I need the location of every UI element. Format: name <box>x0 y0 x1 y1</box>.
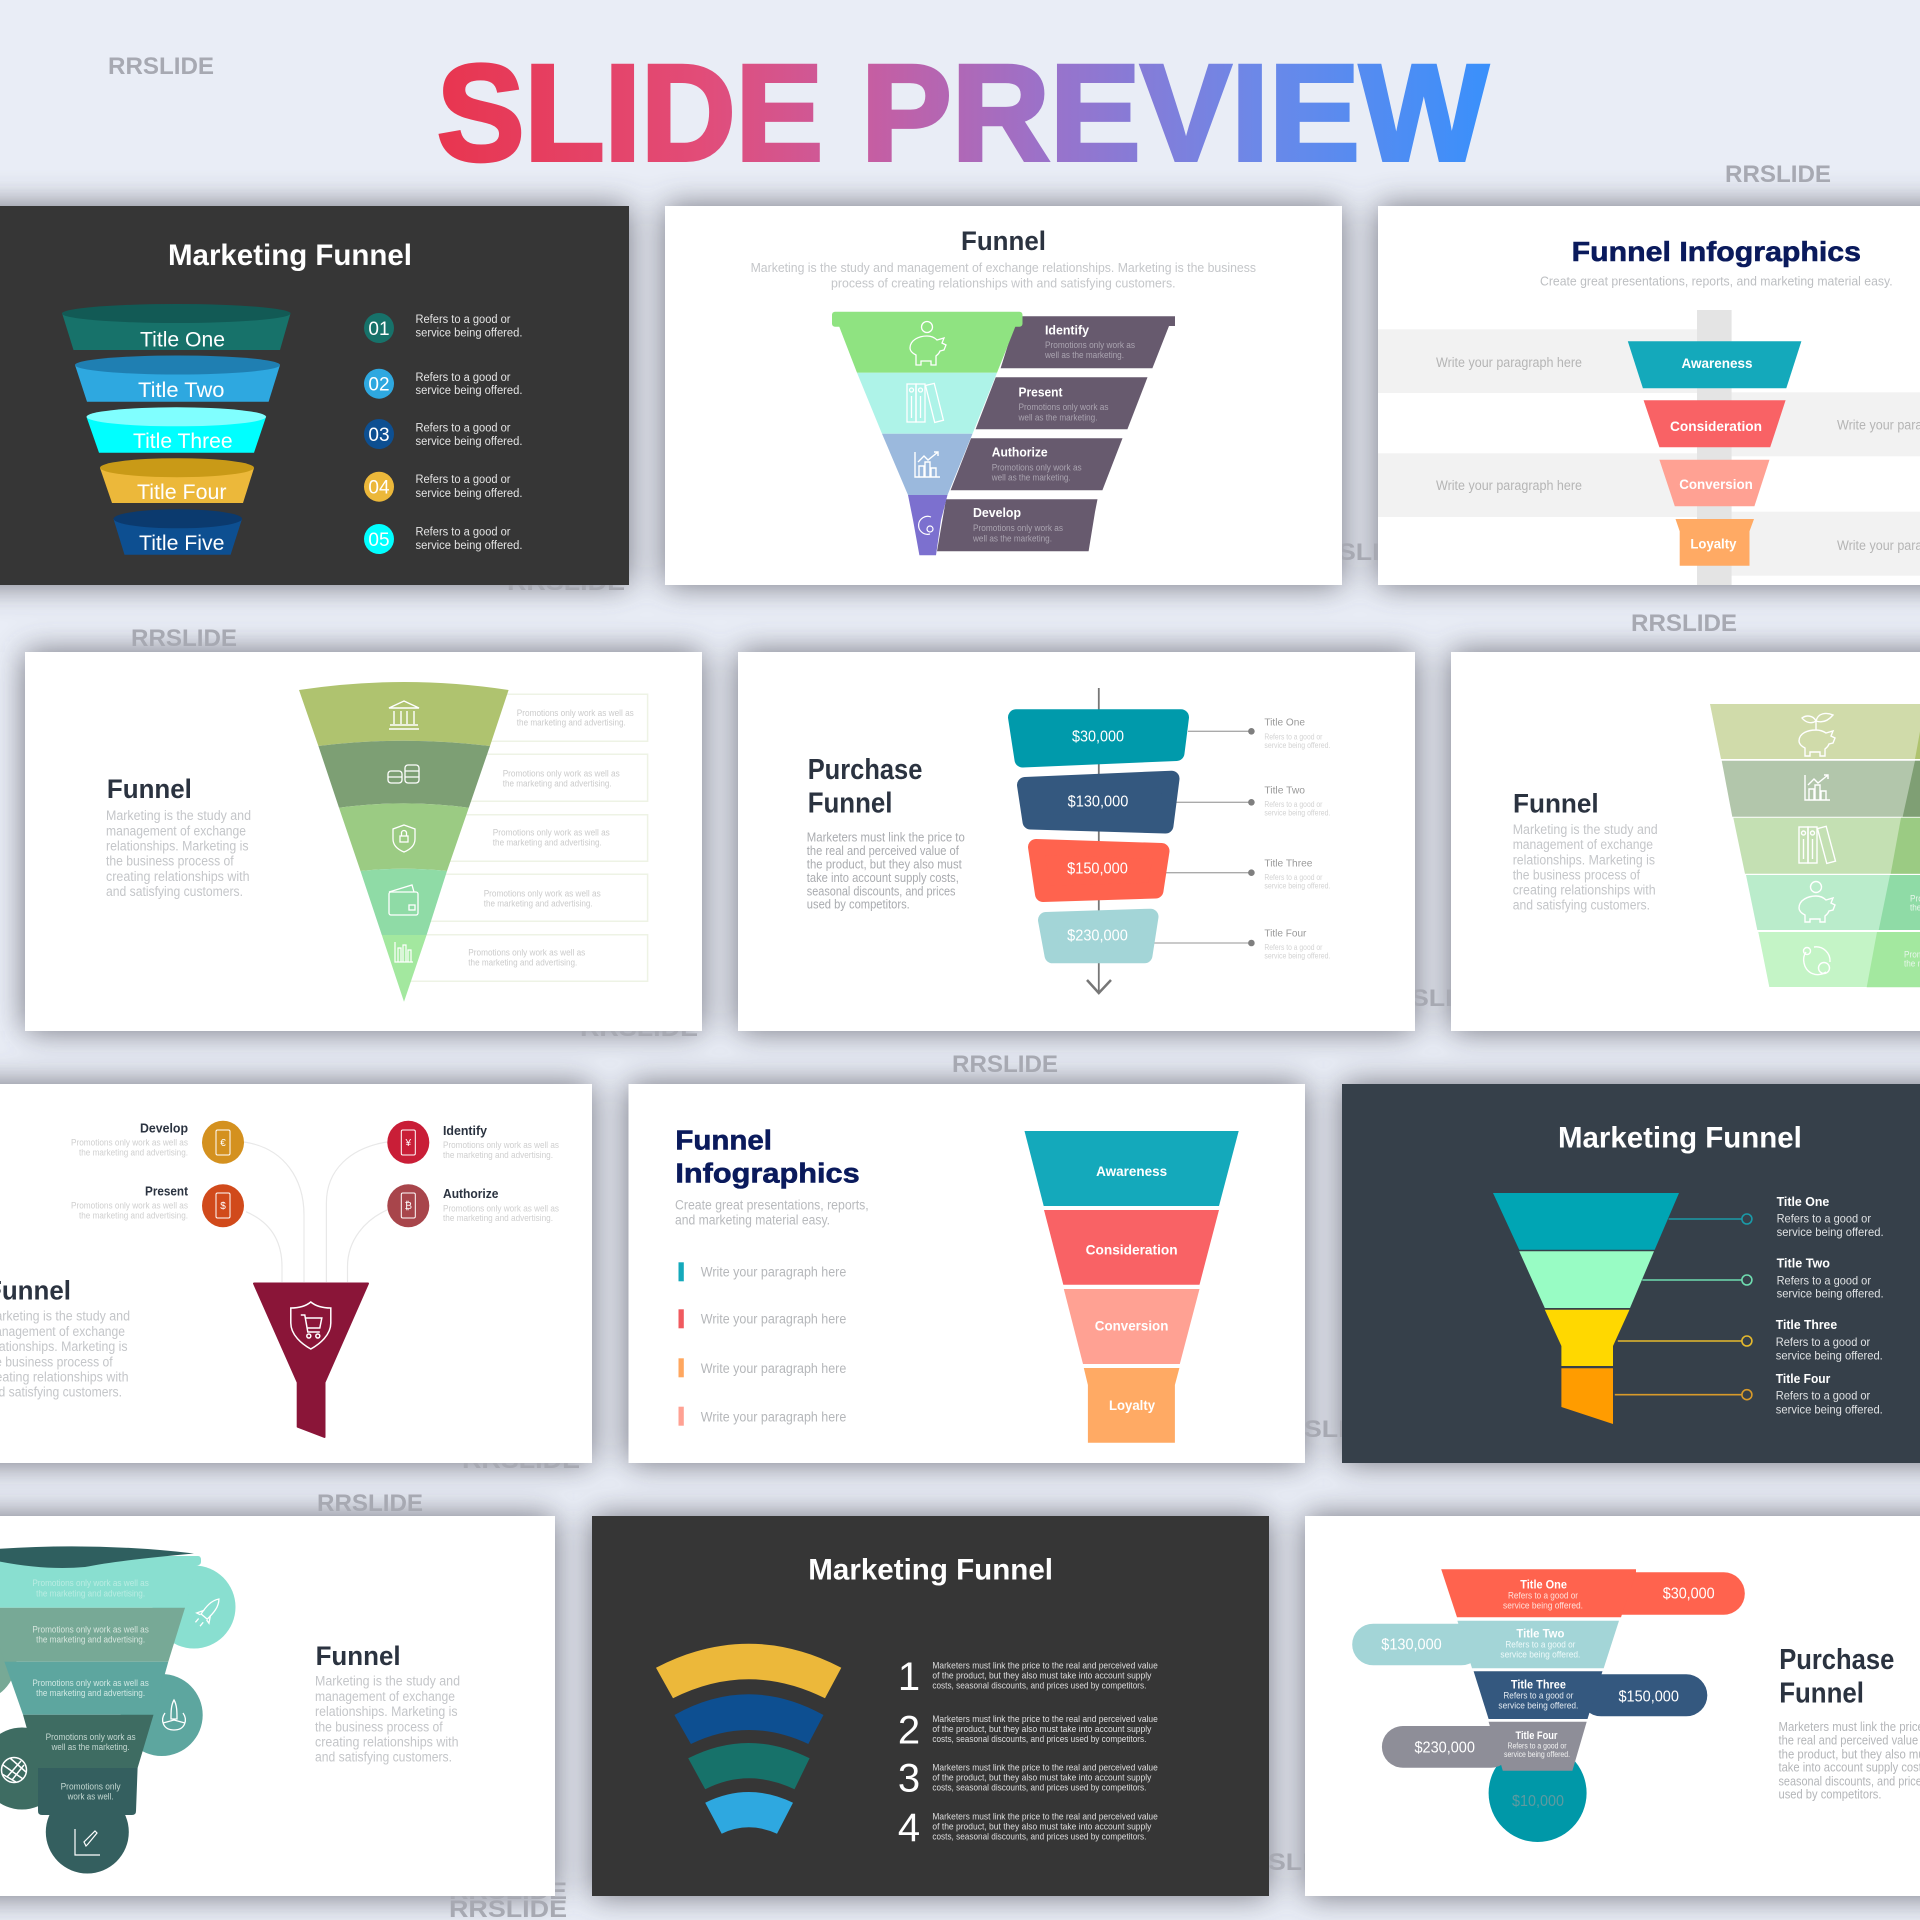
paragraph <box>106 808 251 899</box>
channel labels: Promotions only work as well as <box>443 1203 559 1213</box>
funnel chart: Title Three <box>133 430 233 453</box>
icon: bank <box>389 701 419 729</box>
heading: Funnel <box>675 1124 772 1155</box>
heading: Purchase <box>1779 1644 1894 1676</box>
subtitle: Marketing is the study and management of exchange relationships. Marketing is the business <box>751 261 1256 275</box>
channel labels <box>71 1121 559 1223</box>
labels: service being offered. <box>1777 1287 1884 1301</box>
bar labels: Authorize <box>992 445 1048 460</box>
funnel stages: Conversion <box>1679 476 1753 492</box>
channel labels: the marketing and advertising. <box>79 1148 188 1158</box>
numbered list: 05 <box>368 530 390 551</box>
stage: title four <box>1382 1722 1587 1771</box>
icon: coins <box>388 765 419 783</box>
paragraph: relationships. Marketing is <box>1513 852 1655 867</box>
numbers <box>898 1655 920 1850</box>
paragraphs <box>932 1660 1158 1842</box>
block values: $30,000 <box>1072 729 1124 746</box>
watermarks: RRSLIDE <box>317 1490 423 1517</box>
subtitle: process of creating relationships with and satisfying customers. <box>831 277 1176 291</box>
channel labels: Authorize <box>443 1186 498 1201</box>
icon: bars <box>395 942 413 962</box>
bar labels: Present <box>1018 385 1063 400</box>
connector lines <box>1154 728 1255 946</box>
paragraph: and satisfying customers. <box>106 884 243 899</box>
block values: $150,000 <box>1067 860 1128 877</box>
numbered list: 01 <box>368 319 390 340</box>
stage: title four: Title Four <box>1516 1730 1558 1742</box>
numbers: 1 <box>898 1655 920 1699</box>
bar labels: well as the marketing. <box>1044 350 1124 360</box>
stage: title four: Refers to a good or <box>1508 1742 1567 1751</box>
funnel chart: Title Four <box>137 481 226 504</box>
bar labels: Promotions only work as <box>1045 340 1135 350</box>
paragraph <box>807 830 965 912</box>
paragraph: Marketing is the study and <box>106 808 251 823</box>
funnel chart: Title Two <box>138 379 224 402</box>
box text: Promotions only work as well as <box>517 708 634 718</box>
stage: title one <box>1441 1569 1745 1617</box>
labels: service being offered. <box>1777 1225 1884 1239</box>
layer text: the marketing and advertising. <box>36 1688 145 1698</box>
layer text: Promotions only work as <box>46 1732 136 1742</box>
bar labels: Develop <box>973 505 1021 520</box>
labels: Title Two <box>1777 1255 1830 1270</box>
paragraph: the business process of <box>315 1719 443 1734</box>
watermarks: RRSLIDE <box>449 1878 567 1905</box>
channel labels: the marketing and advertising. <box>79 1211 188 1221</box>
description bars <box>937 316 1175 551</box>
bar labels: Identify <box>1045 322 1090 337</box>
heading: Infographics <box>675 1158 860 1189</box>
heading: Marketing Funnel <box>168 239 412 272</box>
bar labels: well as the marketing. <box>1018 413 1098 423</box>
stage: title four: $230,000 <box>1414 1739 1475 1756</box>
numbered list <box>364 313 522 554</box>
stage: title two: service being offered. <box>1500 1649 1580 1659</box>
paragraph <box>1778 1720 1920 1802</box>
cone chart <box>299 682 509 1002</box>
block values: $230,000 <box>1067 928 1128 945</box>
watermarks: RRSLIDE <box>462 1447 580 1474</box>
stage: title four: service being offered. <box>1504 1750 1570 1759</box>
funnel layers <box>0 1546 201 1815</box>
labels: service being offered. <box>1776 1348 1883 1362</box>
labels: Refers to a good or <box>1777 1212 1871 1226</box>
numbers: 4 <box>898 1806 920 1850</box>
channel labels: the marketing and advertising. <box>443 1150 553 1160</box>
arc funnel <box>656 1644 841 1834</box>
panel: marketing funnel dark five titles <box>0 206 629 585</box>
funnel light layers <box>1710 704 1920 987</box>
description boxes <box>405 694 648 981</box>
panel: funnel infographics with bands <box>1378 206 1920 585</box>
paragraph <box>1513 822 1658 913</box>
paragraph: used by competitors. <box>1778 1788 1882 1802</box>
box text <box>468 708 634 968</box>
panel: teal rocket funnel <box>0 1516 555 1896</box>
bar labels: Promotions only work as <box>992 463 1082 473</box>
arrow <box>1087 688 1111 993</box>
circle icons: ¥ <box>405 1138 412 1149</box>
labels <box>1776 1194 1884 1416</box>
paragraphs: of the product, but they also must take into account supply <box>932 1821 1152 1832</box>
watermarks: RRSLIDE <box>1265 1416 1383 1443</box>
numbered list: service being offered. <box>416 488 522 500</box>
watermarks: RRSLIDE <box>108 53 214 80</box>
subtitle <box>675 1197 869 1228</box>
watermarks: RRSLIDE <box>1372 985 1490 1012</box>
title: SLIDE <box>437 37 823 190</box>
funnel stages <box>1628 341 1801 566</box>
paragraphs: Marketers must link the price to the real and perceived value <box>932 1762 1158 1773</box>
paragraph: creating relationships with <box>106 869 250 884</box>
paragraph: the business process of <box>1513 867 1640 882</box>
circle icons: ₿ <box>405 1200 412 1212</box>
paragraphs: Marketers must link the price to the real and perceived value <box>932 1660 1158 1671</box>
side labels: Title Three <box>1264 858 1313 870</box>
stage: title one: Refers to a good or <box>1508 1591 1578 1601</box>
panel: red funnel with four channels <box>0 1084 592 1463</box>
side labels: Title One <box>1264 717 1305 729</box>
funnel stages: Awareness <box>1682 355 1753 371</box>
side labels: service being offered. <box>1264 951 1330 960</box>
side circles <box>0 1566 236 1874</box>
numbered list: service being offered. <box>416 328 522 340</box>
layer text: work as well. <box>67 1791 114 1801</box>
watermarks: RRSLIDE <box>131 625 237 652</box>
paragraphs: costs, seasonal discounts, and prices used by competitors. <box>932 1734 1146 1745</box>
funnel stages: Conversion <box>1095 1318 1168 1334</box>
labels: Title One <box>1777 1194 1829 1209</box>
numbered list: Refers to a good or <box>416 314 511 326</box>
icon: plant piggy <box>1799 713 1835 756</box>
layer text: Promotions only work as well as <box>32 1578 149 1588</box>
bar labels: Promotions only work as <box>1018 402 1109 412</box>
heading: Funnel <box>1513 789 1599 819</box>
side labels: service being offered. <box>1264 741 1330 750</box>
stage: title three: Title Three <box>1511 1677 1566 1691</box>
numbered list: Refers to a good or <box>416 474 511 486</box>
layer text <box>32 1578 149 1801</box>
labels: Refers to a good or <box>1776 1335 1870 1349</box>
panel: marketing funnel slate <box>1342 1084 1920 1463</box>
funnel cone <box>832 312 1022 555</box>
bullet list: Write your paragraph here <box>701 1410 846 1425</box>
heading: Funnel <box>808 788 892 820</box>
side labels: Title Four <box>1264 927 1307 939</box>
icon: shield lock <box>393 825 415 852</box>
icon: globe rocket <box>2 1758 26 1782</box>
icon: rocket <box>192 1594 225 1629</box>
channel labels: Promotions only work as well as <box>443 1140 559 1150</box>
paragraphs: costs, seasonal discounts, and prices used by competitors. <box>932 1782 1146 1793</box>
numbered list: service being offered. <box>416 436 522 448</box>
panel: purchase funnel <box>738 652 1415 1031</box>
paragraph: Marketers must link the price to <box>807 830 965 844</box>
icon: shield cart <box>291 1302 331 1349</box>
layer text: the marketing and advertising. <box>36 1588 145 1598</box>
funnel chart: Title One <box>140 329 225 352</box>
box text: the marketing and advertising. <box>517 718 626 728</box>
bullet list: Write your paragraph here <box>701 1312 846 1327</box>
icon: piggy coin <box>1799 882 1835 922</box>
paragraphs: Marketers must link the price to the real and perceived value <box>932 1714 1158 1725</box>
box text: Promotions only work as well as <box>484 889 601 899</box>
channel labels: Identify <box>443 1123 488 1138</box>
band text: Write your paragraph here <box>1436 355 1582 370</box>
watermarks: RRSLIDE <box>1631 610 1737 637</box>
icon: cycle <box>919 516 933 534</box>
box text: the marketing and advertising. <box>503 778 612 788</box>
side labels: Refers to a good or <box>1264 943 1323 952</box>
panel: marketing funnel arcs <box>592 1516 1269 1896</box>
icon: rocket chart <box>75 1829 100 1855</box>
stage: title one: $30,000 <box>1663 1586 1715 1603</box>
stage: title two: Title Two <box>1516 1626 1564 1640</box>
channel labels: the marketing and advertising. <box>443 1213 553 1223</box>
paragraphs: of the product, but they also must take into account supply <box>932 1724 1152 1735</box>
labels: service being offered. <box>1776 1402 1883 1416</box>
band text <box>1436 355 1920 553</box>
subtitle: Create great presentations, reports, <box>675 1197 869 1212</box>
paragraph: Marketing is the study and <box>1513 822 1658 837</box>
channel labels: Promotions only work as well as <box>71 1201 188 1211</box>
base circle <box>1489 1744 1587 1842</box>
connector curves <box>244 1142 387 1282</box>
paragraphs: Marketers must link the price to the real and perceived value <box>932 1811 1158 1822</box>
heading: Marketing Funnel <box>1558 1121 1802 1154</box>
stage: title three <box>1474 1671 1707 1719</box>
bullet list <box>678 1262 846 1426</box>
paragraph: creating relationships with <box>1513 883 1656 898</box>
numbered list: service being offered. <box>416 540 522 552</box>
paragraph: creating relationships with <box>315 1734 459 1749</box>
box text: the marketing and advertising. <box>484 899 593 909</box>
heading <box>1779 1644 1894 1710</box>
watermarks: RRSLIDE <box>1725 161 1831 188</box>
layer text: well as the marketing. <box>51 1742 130 1752</box>
box text: Promotions only work as well as <box>493 828 610 838</box>
stage: title three: service being offered. <box>1498 1700 1578 1710</box>
watermarks: RRSLIDE <box>1299 539 1417 566</box>
paragraph: management of exchange <box>106 823 246 838</box>
paragraphs: of the product, but they also must take into account supply <box>932 1670 1152 1681</box>
icon: cycle <box>1804 947 1830 975</box>
box text: the marketing and advertising. <box>468 958 577 968</box>
labels: Title Four <box>1776 1371 1830 1386</box>
channel labels: Present <box>145 1184 189 1199</box>
watermarks: RRSLIDE <box>507 569 625 596</box>
box text: Promotions only work as well as <box>468 948 586 958</box>
heading: Funnel <box>961 226 1046 256</box>
bullet list: Write your paragraph here <box>701 1264 846 1279</box>
funnel dark layers <box>1867 704 1920 987</box>
stage: title three: $150,000 <box>1618 1688 1679 1705</box>
channel labels: Promotions only work as well as <box>71 1138 188 1148</box>
funnel chart <box>62 304 291 555</box>
background bands <box>1378 310 1920 585</box>
layer text: Promotions only work as well as <box>32 1625 149 1635</box>
bar labels: Promotions only work as <box>973 523 1063 533</box>
watermarks: RRSLIDE <box>1229 1849 1347 1876</box>
side labels: Title Two <box>1264 784 1305 796</box>
side labels: Refers to a good or <box>1264 800 1323 809</box>
paragraph: relationships. Marketing is <box>106 839 249 854</box>
icon: wallet <box>389 885 418 915</box>
icon: growth chart <box>1805 775 1830 800</box>
layer text: the marketing and advertising. <box>36 1635 145 1645</box>
numbered list: Refers to a good or <box>416 527 511 539</box>
panel: funnel identify present authorize develop <box>665 206 1342 585</box>
paragraph: relationships. Marketing is <box>315 1704 458 1719</box>
box text: Promotions only work as well as <box>503 768 620 778</box>
funnel stages: Loyalty <box>1109 1397 1155 1413</box>
heading: Purchase <box>808 754 922 786</box>
paragraph: and satisfying customers. <box>1513 898 1650 913</box>
icon: growth chart <box>915 452 940 477</box>
side labels: Refers to a good or <box>1264 873 1323 882</box>
circle icons: € <box>220 1138 226 1149</box>
side labels: Refers to a good or <box>1264 732 1323 741</box>
subtitle: Create great presentations, reports, and marketing material easy. <box>1540 274 1893 289</box>
paragraph: management of exchange <box>315 1689 455 1704</box>
paragraph: take into account supply costs, <box>807 871 959 885</box>
title <box>437 37 1489 190</box>
bar labels: well as the marketing. <box>972 533 1052 543</box>
paragraph: management of exchange <box>1513 837 1653 852</box>
heading <box>808 754 922 820</box>
paragraph: used by competitors. <box>807 898 910 912</box>
paragraphs: costs, seasonal discounts, and prices used by competitors. <box>932 1680 1146 1691</box>
icon: piggy bank <box>910 322 946 365</box>
numbered list: 03 <box>368 425 390 446</box>
heading: Funnel Infographics <box>1572 236 1861 267</box>
stage: title two: $130,000 <box>1381 1637 1442 1654</box>
funnel stages <box>1024 1131 1239 1443</box>
numbered list: 02 <box>368 375 390 396</box>
labels: Refers to a good or <box>1776 1389 1870 1403</box>
subtitle: and marketing material easy. <box>675 1213 830 1228</box>
subtitle <box>751 261 1256 291</box>
numbered list: Refers to a good or <box>416 372 511 384</box>
panel: pale green funnel <box>1451 652 1920 1031</box>
circle icons <box>202 1121 429 1227</box>
icon: books <box>1799 826 1835 863</box>
labels: Title Three <box>1776 1317 1837 1332</box>
base circle: $10,000 <box>1512 1793 1564 1810</box>
numbered list: 04 <box>368 478 390 499</box>
side labels <box>1264 717 1330 960</box>
paragraph: the business process of <box>106 854 234 869</box>
heading: Funnel <box>107 774 192 804</box>
numbers: 3 <box>898 1757 920 1801</box>
funnel stages: Consideration <box>1670 418 1762 434</box>
paragraph: the real and perceived value of <box>807 844 959 858</box>
title: PREVIEW <box>861 37 1489 190</box>
band text: Write your paragraph here <box>1436 478 1582 493</box>
icon: launch rocket <box>163 1700 185 1730</box>
paragraphs: costs, seasonal discounts, and prices used by competitors. <box>932 1831 1146 1842</box>
stage: title one: service being offered. <box>1503 1601 1583 1611</box>
layer text: Promotions only work as well as <box>32 1678 149 1688</box>
funnel shape <box>254 1284 368 1437</box>
numbers: 2 <box>898 1708 920 1752</box>
funnel stages: Consideration <box>1086 1241 1178 1257</box>
panel: funnel infographics list <box>628 1084 1305 1463</box>
numbered list: service being offered. <box>416 385 522 397</box>
watermarks: RRSLIDE <box>580 1015 698 1042</box>
box text: the marketing and advertising. <box>493 838 602 848</box>
heading: Funnel <box>1779 1678 1864 1710</box>
bar labels <box>972 322 1135 543</box>
circle icons: $ <box>220 1201 226 1212</box>
panel: green cone funnel <box>25 652 702 1031</box>
paragraph <box>315 1674 460 1765</box>
layer text: Promotions only <box>61 1781 121 1791</box>
funnel chart: Title Five <box>139 532 224 555</box>
funnel blocks <box>1016 717 1181 955</box>
side labels: service being offered. <box>1264 882 1330 891</box>
funnel layer text <box>1904 894 1920 969</box>
channel labels: Develop <box>140 1121 188 1136</box>
block values <box>1067 729 1129 945</box>
stage: title two <box>1352 1621 1619 1668</box>
icon: books <box>907 383 943 422</box>
funnel stages: Awareness <box>1096 1163 1167 1179</box>
heading: Funnel <box>316 1641 401 1671</box>
numbered list: Refers to a good or <box>416 423 511 435</box>
funnel chart <box>1493 1193 1679 1424</box>
paragraph: and satisfying customers. <box>315 1750 452 1765</box>
paragraph: Marketing is the study and <box>315 1674 460 1689</box>
paragraphs: of the product, but they also must take into account supply <box>932 1772 1152 1783</box>
panel: purchase funnel with pills <box>1305 1516 1920 1896</box>
connectors <box>1615 1214 1752 1400</box>
heading: Marketing Funnel <box>808 1553 1053 1586</box>
stage: title one: Title One <box>1520 1578 1567 1592</box>
labels: Refers to a good or <box>1777 1273 1871 1287</box>
bar labels: well as the marketing. <box>991 473 1071 483</box>
bullet list: Write your paragraph here <box>701 1361 846 1376</box>
watermarks: RRSLIDE <box>952 1051 1058 1078</box>
paragraph: seasonal discounts, and prices <box>807 884 956 898</box>
side labels: service being offered. <box>1264 809 1330 818</box>
stage: title three: Refers to a good or <box>1503 1690 1573 1700</box>
heading <box>675 1124 860 1189</box>
block values: $130,000 <box>1068 794 1129 811</box>
funnel stages: Loyalty <box>1690 535 1737 551</box>
paragraph <box>0 1309 130 1400</box>
stage: title two: Refers to a good or <box>1505 1639 1575 1649</box>
paragraph: the product, but they also must <box>807 857 962 871</box>
